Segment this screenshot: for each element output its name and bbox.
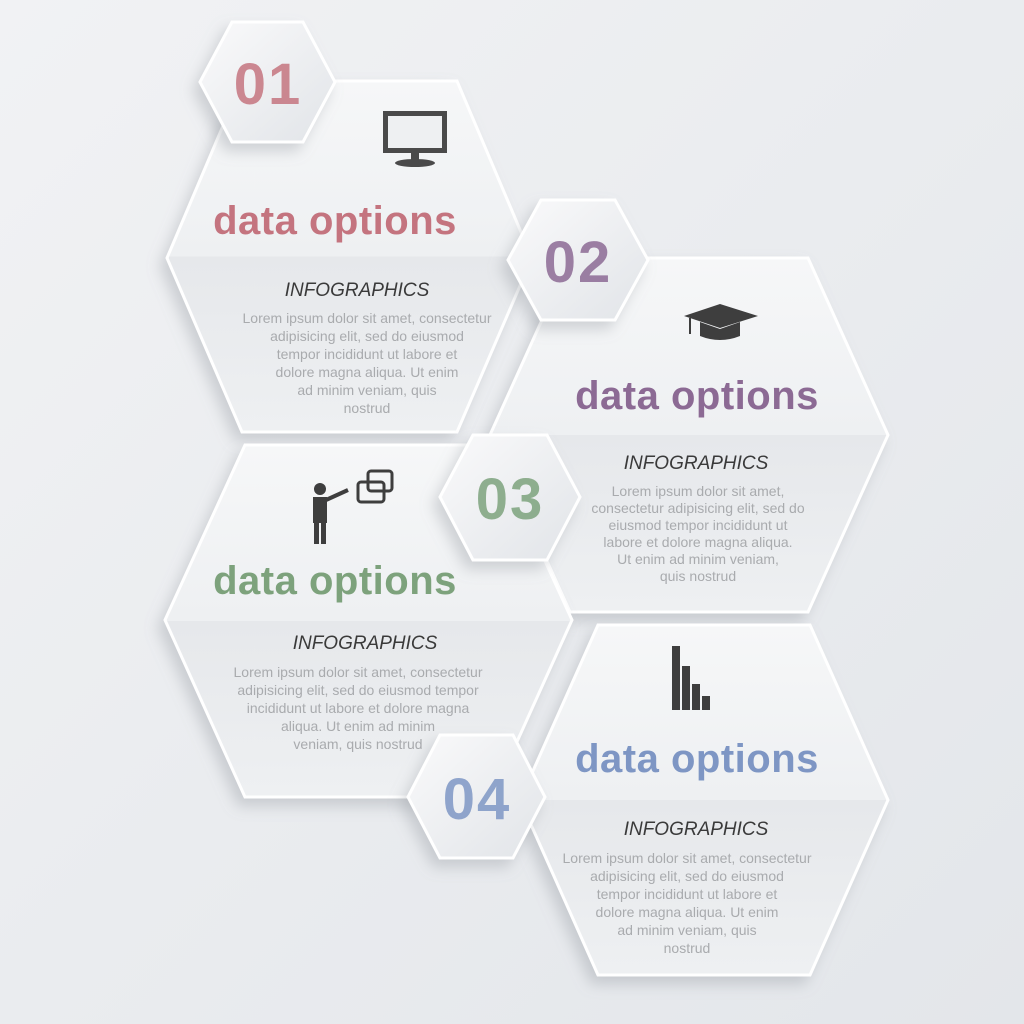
panel: 01 [167,81,532,432]
body 2: quis nostrud [660,568,736,584]
body 3: adipisicing elit, sed do eiusmod tempor [237,682,479,698]
title 2: data options [575,374,819,418]
body 3: incididunt ut labore et dolore magna [247,700,470,716]
body 1: dolore magna aliqua. Ut enim [276,364,458,380]
body 3: veniam, quis nostrud [293,736,423,752]
title 4: data options [575,737,819,781]
panel: 02 [490,258,888,612]
body 2: Lorem ipsum dolor sit amet, [612,483,784,499]
heading 3: INFOGRAPHICS [293,633,438,654]
badge 04: 04 [443,767,511,832]
body 2: consectetur adipisicing elit, sed do [591,500,805,516]
icon: graduation cap [684,304,758,340]
body 1: adipisicing elit, sed do eiusmod [270,328,464,344]
title 3: data options [213,559,457,603]
panel: 03 [165,445,572,797]
body 1: Lorem ipsum dolor sit amet, consectetur [242,310,492,326]
icon: monitor [383,111,447,167]
title 1: data options [213,199,457,243]
body 2: labore et dolore magna aliqua. [603,534,793,550]
badge 04 [408,735,545,858]
body 2: eiusmod tempor incididunt ut [608,517,788,533]
icon: bar chart [672,646,710,710]
body 4: dolore magna aliqua. Ut enim [596,904,778,920]
heading 1: INFOGRAPHICS [285,280,430,301]
body 4: nostrud [664,940,710,956]
body 4: Lorem ipsum dolor sit amet, consectetur [562,850,812,866]
badge 01: 01 [234,52,302,117]
body 2: Ut enim ad minim veniam, [617,551,779,567]
body 4: ad minim veniam, quis [617,922,757,938]
badge 02 [508,200,648,320]
heading 4: INFOGRAPHICS [624,819,769,840]
body 1: tempor incididunt ut labore et [277,346,457,362]
badge 01 [200,22,335,142]
badge 03: 03 [476,467,544,532]
icon: presenter [313,471,392,544]
badge 02: 02 [544,230,612,295]
body 4: tempor incididunt ut labore et [597,886,777,902]
body 1: ad minim veniam, quis [297,382,437,398]
badge 03 [440,435,580,560]
body 4: adipisicing elit, sed do eiusmod [590,868,784,884]
heading 2: INFOGRAPHICS [624,453,769,474]
body 3: aliqua. Ut enim ad minim [281,718,435,734]
body 3: Lorem ipsum dolor sit amet, consectetur [234,664,483,680]
panel: 04 [520,625,888,975]
body 1: nostrud [344,400,390,416]
